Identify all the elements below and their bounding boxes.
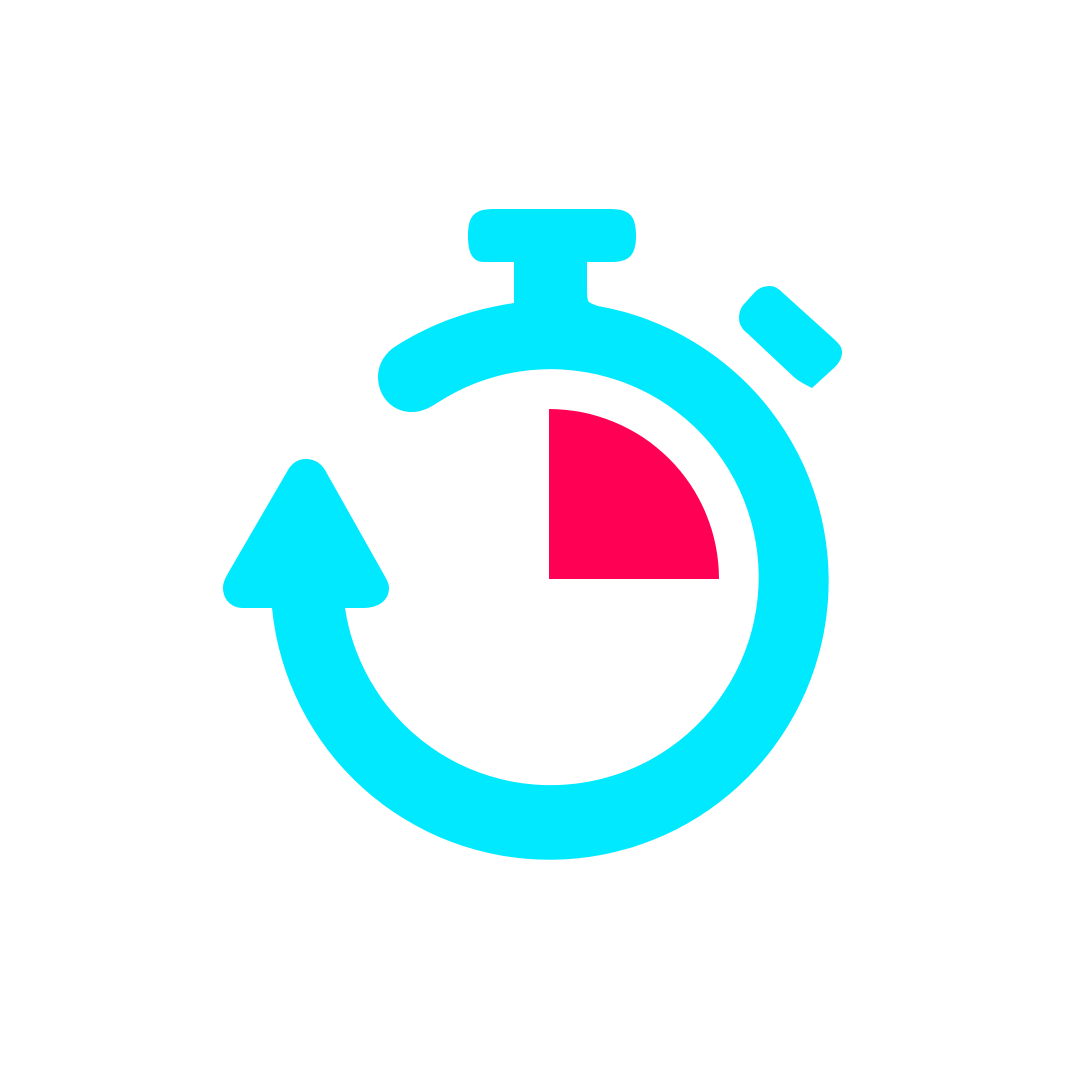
quarter-circle elapsed time wedge xyxy=(549,409,719,579)
stopwatch body: crown, ring and return arrow xyxy=(223,209,829,860)
stopwatch side button xyxy=(739,286,842,388)
